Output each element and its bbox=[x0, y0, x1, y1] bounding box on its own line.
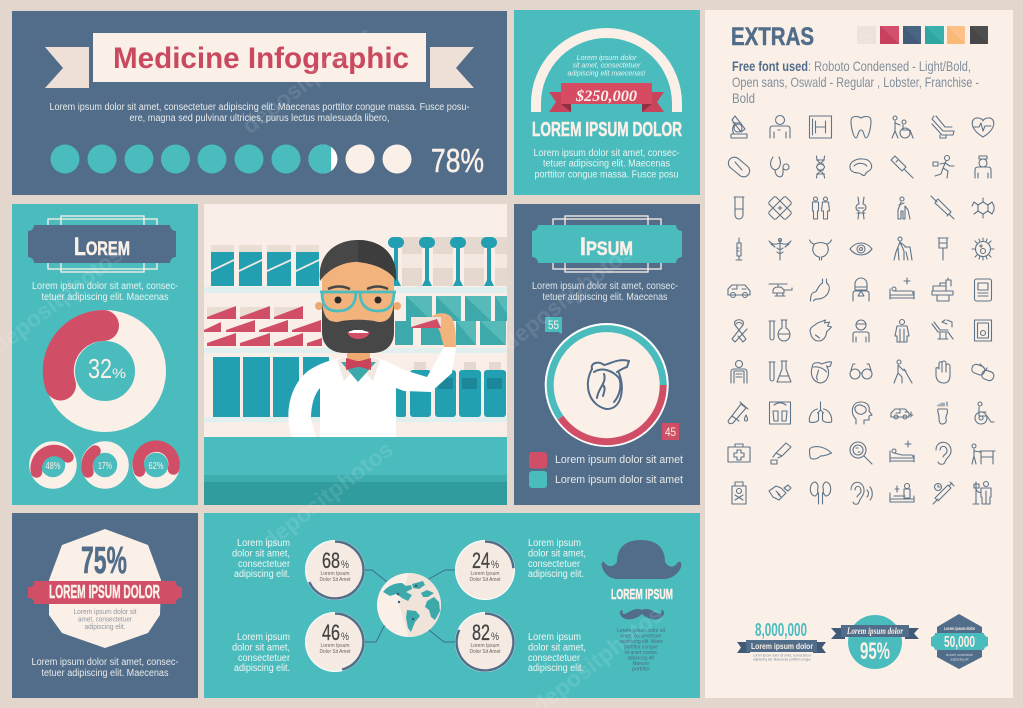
stat: eight million: Lorem ipsum dolor sit amet, consectetuer bbox=[753, 654, 812, 658]
panel: world stats bbox=[204, 513, 700, 698]
icon: dna bbox=[816, 156, 824, 178]
panel text bbox=[32, 657, 178, 679]
text block top left: dolor sit amet, bbox=[232, 548, 290, 560]
badge text: amet, consectetuer bbox=[78, 614, 132, 624]
lorem plaque: LOREM bbox=[74, 233, 130, 261]
icon: running medic bbox=[933, 156, 954, 178]
icon: syringe with gauge bbox=[933, 482, 954, 504]
panel: pharmacist illustration bbox=[204, 204, 507, 505]
stat circle 46%: % bbox=[341, 631, 349, 643]
ipsum text: tetuer adipiscing elit. Maecenas bbox=[542, 292, 668, 303]
stat: ninety five percent: Lorem ipsum dolor bbox=[846, 626, 903, 636]
shelves bbox=[204, 287, 507, 422]
stat circle 82% bbox=[455, 612, 515, 672]
arch caption: Lorem ipsum dolor bbox=[576, 53, 637, 62]
donut chart 17%: 17% bbox=[98, 461, 112, 472]
stat circle 82%: Lorem Ipsum bbox=[470, 643, 500, 649]
text block bottom right: dolor sit amet, bbox=[528, 642, 586, 654]
intro text: ere, magna sed pulvinar ultricies, purus lectus malesuada libero, bbox=[130, 113, 390, 124]
moustache text: adipiscing elit bbox=[628, 656, 655, 662]
text block top right: dolor sit amet, bbox=[528, 548, 586, 560]
stat circle 46%: Dolor Sit Amet bbox=[320, 649, 351, 655]
icon: eyeglasses bbox=[850, 364, 872, 379]
icon: footprint bbox=[938, 402, 948, 424]
stat circle 82%: 82 bbox=[472, 620, 490, 645]
icon: patient with IV bbox=[973, 482, 991, 504]
head bbox=[315, 240, 401, 353]
text block top left: adipiscing elit. bbox=[234, 569, 290, 580]
icon: ribbon bbox=[732, 320, 747, 342]
icon: bladder bbox=[810, 240, 832, 260]
icon: crutch tool bbox=[891, 156, 913, 178]
arch caption bbox=[568, 53, 646, 78]
text block bottom left: adipiscing elit. bbox=[234, 663, 290, 674]
stat circle 24%: 24 bbox=[472, 548, 490, 573]
icon: dropper bbox=[771, 443, 791, 464]
icon: woman bust bbox=[853, 278, 869, 301]
donut chart 17% bbox=[87, 447, 123, 483]
text block bottom right: Lorem ipsum bbox=[528, 632, 581, 643]
icon: raised hand bbox=[936, 361, 950, 383]
extras heading: EXTRAS bbox=[731, 23, 814, 51]
icon: dental chair bbox=[932, 116, 954, 138]
font note: Bold bbox=[732, 90, 755, 106]
font note: Free font used: Roboto Condensed - Light/Bold, bbox=[732, 58, 971, 74]
upper right bottles bbox=[388, 237, 507, 286]
lower left boxes bbox=[213, 357, 329, 417]
icon: caduceus bbox=[769, 238, 791, 260]
stat circle 24%: Dolor Sit Amet bbox=[470, 577, 501, 583]
stat: fifty thousand: Lorem ipsum dolor bbox=[944, 626, 975, 631]
icon: hand on body bbox=[810, 320, 832, 341]
prize text: Lorem ipsum dolor sit amet, consec- bbox=[534, 148, 680, 159]
stat: fifty thousand: 50,000 bbox=[944, 634, 975, 651]
percentage 78%: 78% bbox=[431, 142, 484, 179]
icon: crutch bbox=[938, 238, 948, 260]
price ribbon: $250,000 bbox=[575, 88, 637, 105]
price ribbon bbox=[549, 83, 664, 112]
icon: treatment chair bbox=[932, 320, 953, 339]
panel: prize bbox=[514, 10, 700, 195]
icon: tube and flask bbox=[769, 320, 790, 341]
tag 55: 55 bbox=[548, 318, 559, 332]
donut chart 48% bbox=[35, 447, 71, 483]
stat circle 46%: 46 bbox=[322, 620, 340, 645]
icon: patient bust bbox=[853, 320, 869, 342]
text block bottom right: adipiscing elit. bbox=[528, 663, 584, 674]
stat circle 82%: Dolor Sit Amet bbox=[470, 649, 501, 655]
icon: tube with drop bbox=[728, 402, 748, 424]
75 percent number: 75% bbox=[81, 540, 127, 582]
icon: tooth bbox=[851, 116, 871, 138]
prize text: tetuer adipiscing elit. Maecenas bbox=[543, 158, 670, 170]
donut chart 62%: 62% bbox=[148, 461, 164, 472]
icon: person with walker bbox=[894, 237, 912, 260]
stat: fifty thousand: adipiscing elit bbox=[950, 658, 969, 662]
icon: head with brain bbox=[852, 402, 872, 424]
icon: doctor bbox=[770, 116, 790, 138]
panel: ipsum bbox=[514, 204, 700, 505]
text block top right bbox=[528, 538, 586, 580]
icon: tube and beaker bbox=[769, 361, 791, 382]
icon: knee joint bbox=[856, 197, 866, 219]
text: depositphotos bbox=[257, 436, 398, 554]
arch caption: adipiscing elit maecenas! bbox=[568, 68, 646, 78]
ipsum plaque bbox=[532, 216, 682, 272]
ipsum text: Lorem ipsum dolor sit amet, consec- bbox=[532, 281, 678, 292]
stat: ninety five percent bbox=[831, 615, 919, 669]
icon: heart bbox=[588, 360, 629, 409]
lower right bottles bbox=[396, 362, 506, 417]
tag 55 bbox=[545, 317, 562, 334]
panel text: Lorem ipsum dolor sit amet, consec- bbox=[32, 657, 178, 668]
lorem text: Lorem ipsum dolor sit amet, consec- bbox=[32, 281, 178, 292]
icon: heart organ bbox=[811, 362, 832, 383]
text: depositphotos bbox=[237, 21, 378, 139]
connector lines bbox=[362, 570, 458, 642]
icon: wheelchair bbox=[975, 402, 994, 424]
ring chart with heart bbox=[545, 323, 669, 447]
legend: Lorem ipsum dolor sit amet bbox=[555, 474, 683, 486]
counter bbox=[204, 437, 507, 505]
icon: handshake bbox=[769, 485, 791, 500]
icon: person with x-ray bbox=[731, 360, 747, 383]
red plaque bbox=[28, 581, 182, 604]
colour swatches bbox=[857, 26, 988, 44]
lorem text: tetuer adipiscing elit. Maecenas bbox=[42, 292, 168, 303]
icon: syringe diagonal bbox=[931, 196, 954, 219]
stat circle 82%: % bbox=[491, 631, 499, 643]
text: depositphotos bbox=[497, 238, 638, 356]
title: Medicine Infographic bbox=[113, 42, 409, 75]
intro text: Lorem ipsum dolor sit amet, consectetuer adipiscing elit. Maecenas porttitor congue massa. Fusce posu- bbox=[50, 102, 470, 113]
text block top right: Lorem ipsum bbox=[528, 538, 581, 549]
icon: massage table bbox=[972, 444, 995, 464]
moustache text bbox=[617, 628, 665, 672]
font note bbox=[732, 58, 979, 106]
lorem plaque bbox=[28, 216, 176, 272]
icon: brain bbox=[850, 159, 872, 176]
stat circle 24% bbox=[455, 540, 515, 600]
icon: ear bbox=[936, 442, 951, 464]
icon: framed device bbox=[974, 320, 992, 341]
icon: virus bbox=[972, 238, 994, 260]
icon: kidneys bbox=[810, 482, 831, 504]
icon: liver bbox=[810, 447, 832, 459]
icon: small ambulance bbox=[891, 409, 913, 419]
text block top right: consectetuer bbox=[528, 559, 581, 570]
stat circle 68%: Dolor Sit Amet bbox=[320, 577, 351, 583]
icon: poison bottle bbox=[732, 482, 746, 504]
panel: lorem bbox=[12, 204, 198, 505]
legend bbox=[529, 452, 683, 488]
icon: device bbox=[974, 279, 992, 301]
text: depositphotos bbox=[742, 458, 883, 576]
green boxes bbox=[395, 296, 507, 345]
panel: extras bbox=[705, 10, 1013, 698]
text block top right: adipiscing elit. bbox=[528, 569, 584, 580]
globe bbox=[377, 573, 441, 637]
red plaque: LOREM IPSUM DOLOR bbox=[49, 582, 160, 602]
badge text: Lorem ipsum dolor sit bbox=[74, 607, 137, 616]
stat circle 68%: 68 bbox=[322, 548, 340, 573]
badge text: adipiscing elit. bbox=[84, 622, 126, 631]
coat bbox=[288, 347, 456, 437]
hand and box bbox=[411, 313, 456, 347]
prize text bbox=[534, 148, 680, 180]
stat circle 46%: Lorem Ipsum bbox=[320, 643, 350, 649]
icon grid bbox=[726, 116, 995, 504]
icon: bed with cross bbox=[890, 441, 914, 462]
stat circle 24%: Lorem Ipsum bbox=[470, 571, 500, 577]
icon: ambulance bbox=[728, 285, 750, 298]
pharmacist figure bbox=[288, 240, 456, 437]
icon: vertical syringe bbox=[736, 238, 742, 260]
icon: bandage bbox=[768, 196, 792, 220]
stat: eight million: 8,000,000 bbox=[755, 620, 807, 640]
arch caption: sit amet, consectetuer bbox=[572, 60, 641, 70]
stat: fifty thousand bbox=[931, 614, 988, 669]
icon: body scale bbox=[770, 402, 790, 424]
ipsum text bbox=[532, 281, 678, 303]
stat circle 46% bbox=[305, 612, 365, 672]
intro text bbox=[50, 102, 470, 124]
arch bbox=[536, 33, 677, 112]
moustache text: porttitor congue bbox=[624, 644, 658, 650]
icon: stomach bbox=[810, 279, 829, 301]
lorem text bbox=[32, 281, 178, 303]
text block bottom left: consectetuer bbox=[238, 653, 291, 664]
icon: hospital sign bbox=[810, 116, 832, 138]
donut chart 62% bbox=[138, 446, 174, 483]
panel: 75 percent bbox=[12, 513, 198, 698]
stat: eight million: adipiscing elit. Maecenas porttitor congue bbox=[753, 658, 811, 662]
text block bottom right: consectetuer bbox=[528, 653, 581, 664]
stat circle 68%: Lorem Ipsum bbox=[320, 571, 350, 577]
text block top left: Lorem ipsum bbox=[237, 538, 290, 549]
stat circle 24%: % bbox=[491, 559, 499, 571]
icon: molecule bbox=[972, 198, 994, 218]
icon: lungs bbox=[809, 402, 832, 422]
ribbon tail left bbox=[45, 47, 89, 88]
text block top left: consectetuer bbox=[238, 559, 291, 570]
text block top left bbox=[232, 538, 291, 580]
tag 45 bbox=[662, 423, 679, 440]
stat: fifty thousand: sit amet, consectetuer bbox=[946, 653, 974, 657]
red boxes bbox=[204, 306, 322, 346]
icon: heart rate bbox=[972, 118, 994, 137]
moustache text: Lorem ipsum dolor sit bbox=[617, 628, 665, 634]
moustache text: amet, consectetuer bbox=[620, 634, 662, 640]
panel text: tetuer adipiscing elit. Maecenas bbox=[42, 668, 168, 679]
stat: eight million: Lorem ipsum dolor bbox=[751, 642, 813, 651]
icon: stethoscope bbox=[771, 157, 789, 177]
stat: ninety five percent: 95% bbox=[860, 638, 890, 665]
progress dots bbox=[50, 144, 412, 174]
text block bottom right bbox=[528, 632, 586, 674]
text block bottom left bbox=[232, 632, 291, 674]
icon: man and woman bbox=[812, 197, 830, 219]
ribbon tail right bbox=[430, 47, 474, 88]
icon: hospital bed bbox=[890, 278, 914, 299]
icon: surgery bbox=[932, 278, 953, 301]
prize text: porttitor congue massa. Fusce posu bbox=[534, 170, 678, 180]
octagon badge bbox=[49, 529, 161, 648]
icon: microscope bbox=[731, 116, 747, 138]
icon: moustache bbox=[620, 609, 664, 619]
top left boxes bbox=[211, 245, 319, 286]
panel: header bbox=[12, 11, 507, 195]
icon: bowler hat bbox=[602, 540, 681, 579]
donut chart 48%: 48% bbox=[46, 461, 61, 472]
donut chart 32%: 32 bbox=[88, 353, 112, 384]
tag 45: 45 bbox=[665, 425, 676, 439]
icon: wheelchair helper bbox=[892, 116, 913, 138]
icon: bed with visitor bbox=[890, 484, 914, 502]
icon: standing person bbox=[895, 320, 909, 342]
icon: magnifier bbox=[850, 442, 872, 464]
stat circle 68%: % bbox=[341, 559, 349, 571]
donut chart 32% bbox=[58, 326, 150, 416]
icon: eye bbox=[850, 243, 872, 255]
hat caption: LOREM IPSUM bbox=[611, 586, 673, 603]
icon: capsule links bbox=[971, 363, 995, 382]
icon: ear with sound bbox=[851, 482, 872, 504]
moustache text: Maecen bbox=[632, 661, 650, 667]
moustache text: adipiscing elit. Maec bbox=[619, 639, 663, 645]
icon: elderly person bbox=[898, 197, 910, 219]
moustache text: sit amet consec bbox=[624, 650, 658, 656]
prize heading: LOREM IPSUM DOLOR bbox=[532, 119, 682, 141]
icon: blind person bbox=[894, 360, 912, 383]
badge text bbox=[74, 607, 137, 631]
moustache text: porttitor bbox=[632, 666, 650, 672]
legend: Lorem ipsum dolor sit amet bbox=[555, 454, 683, 466]
text: depositphotos bbox=[737, 21, 878, 139]
text block bottom left: dolor sit amet, bbox=[232, 642, 290, 654]
icon: helicopter bbox=[769, 284, 792, 296]
icon: test tube bbox=[734, 197, 744, 219]
donut chart 32%: % bbox=[112, 365, 126, 381]
bow tie bbox=[346, 358, 371, 370]
title bbox=[93, 33, 426, 82]
text block bottom left: Lorem ipsum bbox=[237, 632, 290, 643]
icon: first aid kit bbox=[728, 444, 750, 462]
stat: eight million bbox=[737, 620, 826, 662]
glasses bbox=[320, 292, 396, 311]
stat circle 68% bbox=[305, 540, 365, 600]
ipsum plaque: IPSUM bbox=[580, 233, 633, 261]
icon: nurse bbox=[975, 156, 991, 178]
icon: pill bbox=[726, 155, 752, 179]
